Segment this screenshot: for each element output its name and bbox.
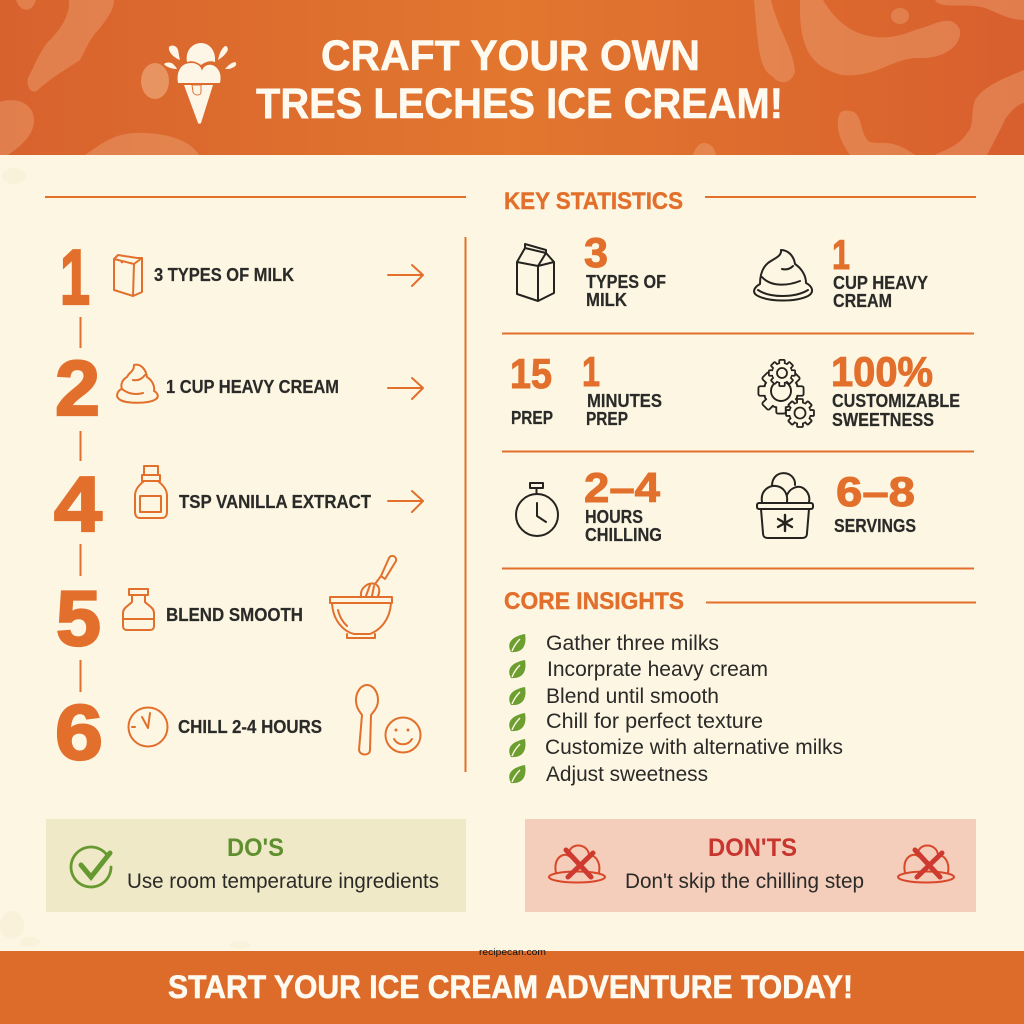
- icon: crossed ice cream right: [898, 846, 954, 882]
- stat: 2-4 hours chilling: 2–4: [584, 464, 661, 511]
- heading: core insights: CORE INSIGHTS: [504, 588, 684, 615]
- stat: 1 minutes prep: [582, 348, 662, 429]
- step 6: CHILL 2-4 HOURS: [178, 717, 322, 737]
- stat: 2-4 hours chilling: CHILLING: [585, 525, 662, 545]
- stat: 1 minutes prep: MINUTES: [587, 391, 662, 411]
- icon: crossed ice cream left: [549, 846, 605, 882]
- stat: 1 cup heavy cream: CUP HEAVY: [833, 273, 928, 293]
- stat: 3 types of milk: MILK: [586, 290, 627, 310]
- stat: 1 cup heavy cream: 1: [832, 231, 850, 278]
- list: core insights: Adjust sweetness: [546, 763, 708, 786]
- icon: ice cream cone: [164, 43, 236, 124]
- stat: 6-8 servings: SERVINGS: [834, 516, 916, 536]
- icon: smiley: [386, 718, 420, 752]
- stat: 6-8 servings: [757, 468, 916, 538]
- stat: 3 types of milk: [517, 229, 666, 310]
- icon: spoon: [356, 685, 378, 754]
- footer banner: [0, 951, 1024, 1024]
- panel: key statistics: [502, 229, 974, 568]
- icon: bowl and whisk: [330, 556, 396, 638]
- stat: 6-8 servings: 6–8: [836, 468, 915, 515]
- step 4: 4: [54, 460, 102, 548]
- title: CRAFT YOUR OWN: [321, 32, 700, 80]
- list: core insights: Customize with alternative milks: [545, 736, 843, 759]
- stat: 1 minutes prep: 1: [582, 348, 600, 395]
- stat: 100% customizable sweetness: CUSTOMIZABLE: [832, 391, 960, 411]
- footer banner: START YOUR ICE CREAM ADVENTURE TODAY!: [168, 969, 853, 1005]
- title: [256, 32, 783, 128]
- stat: 15 prep: [510, 350, 553, 428]
- step 6: [55, 685, 420, 776]
- step 1: 1: [60, 233, 90, 321]
- title: TRES LECHES ICE CREAM!: [256, 80, 783, 128]
- list: core insights: Gather three milks: [546, 632, 719, 655]
- list: core insights: [509, 632, 843, 786]
- stat: 1 cup heavy cream: CREAM: [833, 291, 892, 311]
- stat: 100% customizable sweetness: [758, 348, 960, 430]
- step 4: [54, 460, 423, 548]
- step 5: 5: [56, 574, 101, 662]
- stat: 3 types of milk: TYPES OF: [586, 272, 666, 292]
- left section rule: [45, 196, 466, 198]
- stat: 100% customizable sweetness: 100%: [831, 348, 933, 395]
- panel: do's: DO'S: [227, 834, 284, 862]
- step 2: 1 CUP HEAVY CREAM: [166, 377, 339, 397]
- step 5: [56, 556, 396, 662]
- stat: 1 minutes prep: PREP: [586, 409, 628, 429]
- list: core insights: Incorprate heavy cream: [547, 658, 768, 681]
- step 2: [55, 344, 423, 432]
- list: core insights: Blend until smooth: [546, 685, 719, 708]
- stat: 15 prep: 15: [510, 350, 552, 397]
- heading: key statistics: KEY STATISTICS: [504, 188, 683, 215]
- stat: 1 cup heavy cream: [754, 231, 928, 311]
- stat: 100% customizable sweetness: SWEETNESS: [832, 410, 934, 430]
- watermark: recipecan.com: [479, 947, 546, 958]
- list: core insights: Chill for perfect texture: [546, 710, 763, 733]
- panel: do's: [46, 819, 466, 912]
- header banner: [0, 0, 1024, 155]
- panel: don'ts: DON'TS: [708, 834, 797, 862]
- stat: 15 prep: PREP: [511, 408, 553, 428]
- panel: don'ts: [525, 819, 976, 912]
- stat: 3 types of milk: 3: [584, 229, 608, 276]
- step 4: TSP VANILLA EXTRACT: [179, 492, 371, 512]
- step 6: 6: [55, 688, 103, 776]
- step 1: [60, 233, 423, 321]
- icon: check: [71, 847, 111, 887]
- stat: 2-4 hours chilling: [516, 464, 662, 545]
- step 1: 3 TYPES OF MILK: [154, 265, 294, 285]
- step 2: 2: [55, 344, 100, 432]
- icon: gears: [758, 360, 814, 427]
- step 5: BLEND SMOOTH: [166, 605, 303, 625]
- panel: steps: [54, 233, 423, 776]
- stat: 2-4 hours chilling: HOURS: [585, 507, 643, 527]
- panel: don'ts: Don't skip the chilling step: [625, 870, 864, 893]
- panel: do's: Use room temperature ingredients: [127, 870, 439, 893]
